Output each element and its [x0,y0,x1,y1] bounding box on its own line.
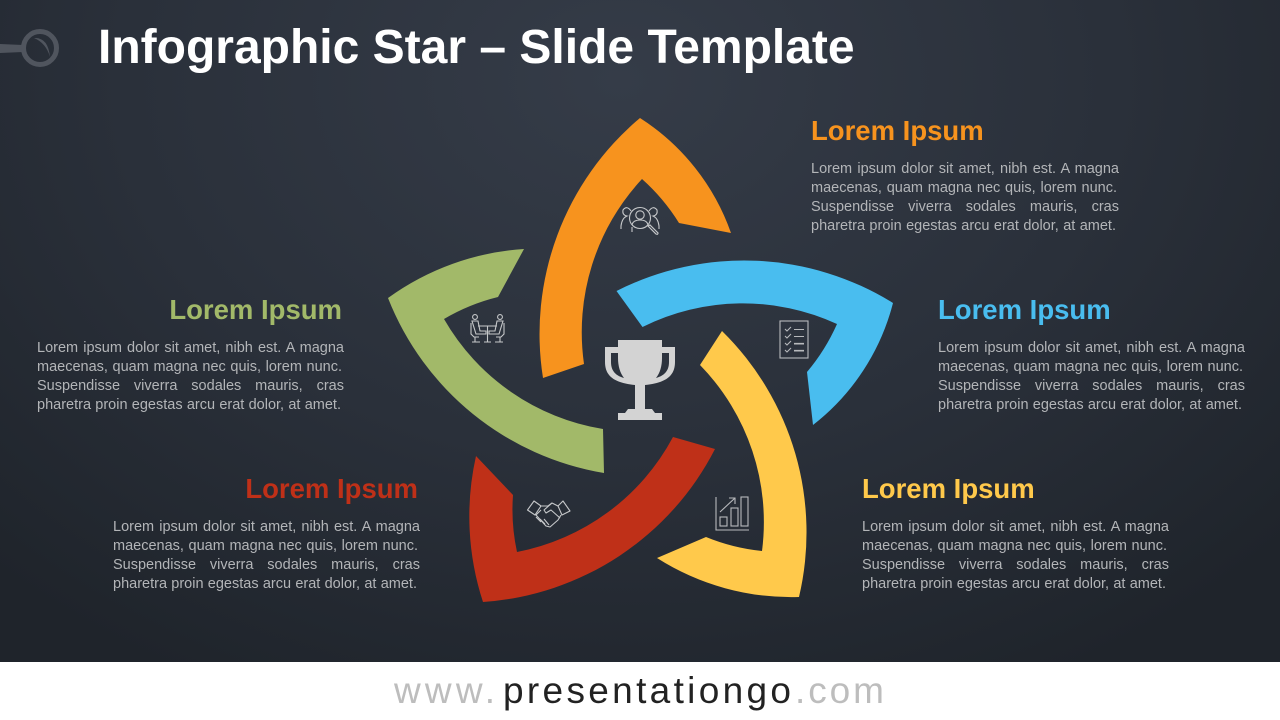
body text: yellow: pharetra proin egestas arcu erat dolor, at amet. [862,576,1166,592]
body text: orange: pharetra proin egestas arcu erat dolor, at amet. [811,218,1116,234]
title: Infographic Star – Slide Template [98,21,855,74]
footer website url: presentationgo [503,670,791,711]
panel: green text [37,294,344,413]
body text: green: pharetra proin egestas arcu erat dolor, at amet. [37,397,341,413]
icon: handshake [528,501,570,527]
body text: yellow: Suspendisse viverra sodales mauris, cras [862,557,1169,573]
panel: blue text [938,294,1245,413]
body text: green [37,340,344,413]
body text: orange: Lorem ipsum dolor sit amet, nibh est. A magna [811,160,1119,176]
body text: red [113,518,420,592]
footer website url [393,670,884,711]
heading: green: Lorem Ipsum [169,294,342,325]
footer website url: .com [795,670,884,711]
star arm: green [388,249,604,473]
star arm: blue [616,260,893,425]
panel: orange text [811,115,1119,234]
body text: blue: maecenas, quam magna nec quis, lorem nunc. [938,359,1243,375]
body text: yellow: maecenas, quam magna nec quis, lorem nunc. [862,538,1167,554]
body text: yellow [862,518,1169,592]
logo key icon [0,32,56,64]
heading: orange: Lorem Ipsum [811,115,984,146]
icon: trophy [605,340,675,420]
panel: yellow text [862,473,1169,592]
body text: green: maecenas, quam magna nec quis, lorem nunc. [37,359,342,375]
icon: checklist [780,321,808,358]
heading: red: Lorem Ipsum [245,473,418,504]
footer website url: www. [393,670,495,711]
body text: red: maecenas, quam magna nec quis, lorem nunc. [113,538,418,554]
body text: orange: maecenas, quam magna nec quis, lorem nunc. [811,180,1117,196]
star arm: orange [540,118,731,378]
panel: red text [113,473,420,592]
icon: people at table [471,315,504,342]
body text: blue [938,340,1245,413]
icon: growth bar chart [716,497,749,530]
body text: green: Suspendisse viverra sodales mauris, cras [37,378,344,394]
star arm: red [469,437,715,602]
body text: red: Suspendisse viverra sodales mauris, cras [113,557,420,573]
body text: blue: Suspendisse viverra sodales mauris, cras [938,378,1245,394]
body text: orange: Suspendisse viverra sodales mauris, cras [811,199,1119,215]
icon: people search [621,208,659,234]
body text: orange [811,160,1119,234]
heading: yellow: Lorem Ipsum [862,473,1035,504]
body text: green: Lorem ipsum dolor sit amet, nibh est. A magna [37,340,344,356]
body text: blue: pharetra proin egestas arcu erat dolor, at amet. [938,397,1242,413]
heading: blue: Lorem Ipsum [938,294,1111,325]
star arm: yellow [657,331,807,597]
body text: red: Lorem ipsum dolor sit amet, nibh est. A magna [113,518,420,534]
body text: yellow: Lorem ipsum dolor sit amet, nibh est. A magna [862,518,1169,534]
body text: red: pharetra proin egestas arcu erat dolor, at amet. [113,576,417,592]
body text: blue: Lorem ipsum dolor sit amet, nibh est. A magna [938,340,1245,356]
